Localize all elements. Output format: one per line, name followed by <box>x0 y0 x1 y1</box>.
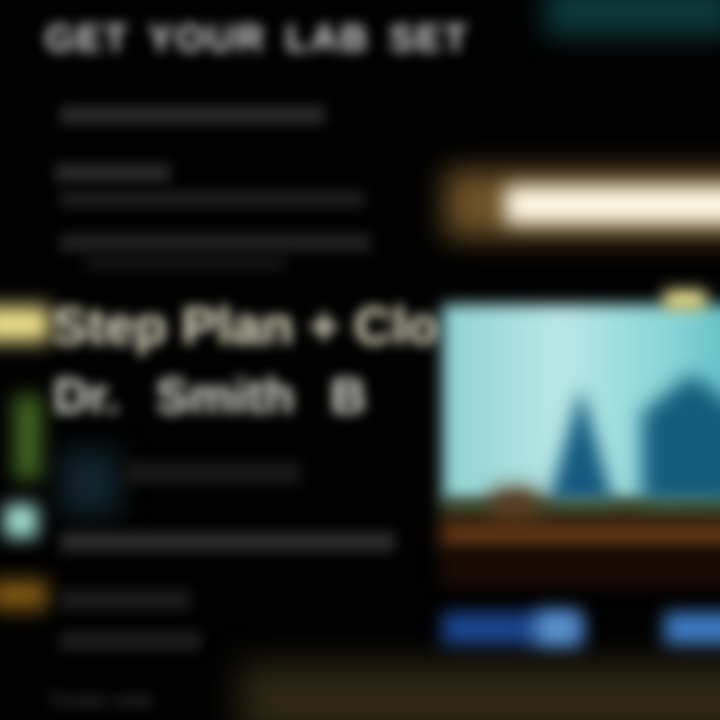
dark ground <box>440 550 720 586</box>
intro line four <box>60 234 370 252</box>
intro line five <box>85 256 285 270</box>
footer text: Footer note <box>50 690 152 712</box>
left accent: yellow <box>0 306 50 342</box>
intro line three <box>60 191 365 207</box>
text block: intro <box>51 102 373 270</box>
brown ground <box>440 520 720 550</box>
panel: top right teal accent <box>545 0 720 36</box>
glow bar: halo <box>445 170 720 238</box>
image panel: scene <box>429 276 720 661</box>
blue strip left <box>442 612 582 646</box>
footer band <box>240 664 720 720</box>
left tower <box>539 385 624 510</box>
blue strip right <box>664 612 720 646</box>
text block: body <box>49 440 399 653</box>
intro line two <box>55 164 170 182</box>
sky <box>442 304 720 502</box>
top yellow accent <box>664 290 706 310</box>
horizon <box>440 502 720 516</box>
body line one <box>125 462 300 484</box>
left accent: orange <box>0 580 48 610</box>
heading line one: Step Plan + Clo <box>52 297 439 356</box>
dark blue block <box>60 450 120 515</box>
left accent: cyan <box>4 504 38 538</box>
heading <box>46 297 444 424</box>
intro line one <box>60 106 325 124</box>
body line two <box>60 532 395 552</box>
tree silhouette <box>492 488 538 520</box>
heading line two: Dr. Smith B <box>53 368 366 424</box>
blue highlight <box>536 612 580 646</box>
right tower <box>626 364 720 512</box>
title: GET YOUR LAB SET <box>45 18 469 60</box>
left accent: green <box>14 395 42 480</box>
body line four <box>60 632 200 650</box>
glow bar <box>505 186 720 224</box>
body line three <box>60 590 190 610</box>
